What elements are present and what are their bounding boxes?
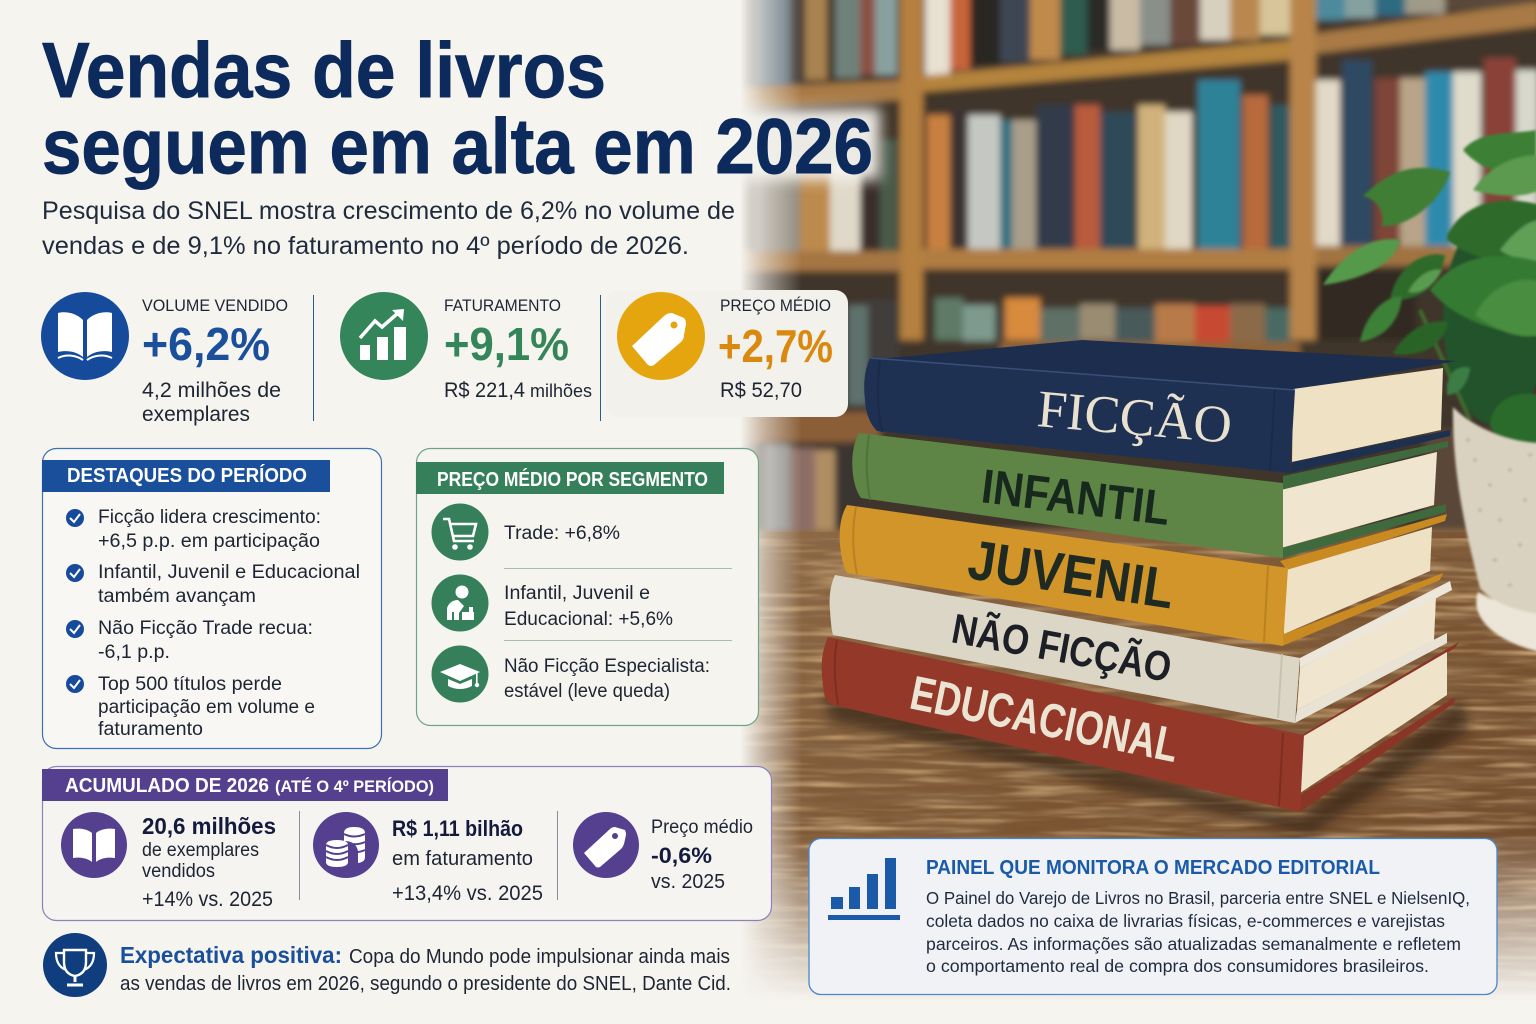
stat: faturamento [340,292,592,402]
item: exemplares [61,812,276,911]
icon: book [61,812,127,878]
segment text: trade: Trade: +6,8% [504,523,620,544]
segment text: infantil: Educacional: +5,6% [504,609,673,630]
stat card: preço médio: R$ 52,70 [720,379,802,402]
segment text: infantil [504,583,673,630]
stat: faturamento: milhões [530,381,592,401]
left fill [0,0,741,1024]
book: Não Ficção: NÃO FICÇÃO [948,605,1175,691]
item: preço médio: Preço médio [651,817,753,838]
bullet text [98,507,360,740]
photo: bottom fade to cream [740,832,1536,1024]
shelf row 3 [765,445,790,530]
book: Não Ficção [830,575,1452,723]
shelf row 2 [848,305,868,405]
stat: faturamento: R$ 221,4 [444,379,525,402]
icon: open book [41,292,129,380]
book stack [822,340,1470,835]
callout: expectativa positiva: Copa do Mundo pode impulsionar ainda mais [349,946,730,968]
bullet text: +6,5 p.p. em participação [98,531,320,552]
title: Vendas de livros [42,26,606,114]
book: Educacional [822,637,1459,812]
subtitle: vendas e de 9,1% no faturamento no 4º período de 2026. [42,232,689,260]
stat card: preço médio: PREÇO MÉDIO [720,296,831,315]
item: preço médio: -0,6% [651,843,712,868]
book: Infantil: INFANTIL [979,460,1173,536]
heading: destaques [42,460,330,492]
book: Juvenil: JUVENIL [964,528,1178,620]
shelf row 0 [755,0,790,85]
photo: wooden table [690,532,1536,1024]
book: Ficção [864,340,1456,473]
stat: volume vendido: +6,2% [142,318,270,370]
title: seguem em alta em 2026 [42,102,873,190]
stat: volume vendido: 4,2 milhões de [142,379,281,402]
icon: price tag [617,292,705,380]
stat card: preço médio: +2,7% [718,320,833,372]
book: Juvenil [840,505,1447,646]
icon: growth chart [340,292,428,380]
panel: preço médio por segmento [416,448,758,726]
subtitle [42,197,735,260]
photo: plant and pot [1323,130,1536,652]
icon: tag [573,812,639,878]
item: exemplares: de exemplares [142,840,259,861]
heading: segmento [416,462,724,494]
icon: coins [313,812,379,878]
item: faturamento: +13,4% vs. 2025 [392,882,543,905]
panel: painel que monitora o mercado editorial: PAINEL QUE MONITORA O MERCADO EDITORIAL [926,857,1380,879]
bullet text: Ficção lidera crescimento: [98,507,321,528]
panel body text: O Painel do Varejo de Livros no Brasil, parceria entre SNEL e NielsenIQ, [926,888,1470,908]
stat card: preço médio [606,290,848,417]
icon: trophy [43,933,107,997]
photo: blurred bookshelf [690,0,1536,590]
heading: acumulado [42,769,448,801]
item: preço médio [573,812,753,893]
icon: graduation cap [432,646,488,702]
bullet text: -6,1 p.p. [98,642,170,663]
book: Educacional: EDUCACIONAL [906,667,1183,773]
stat: volume vendido: exemplares [142,403,250,426]
segment text: especialista [504,656,710,702]
item: exemplares: +14% vs. 2025 [142,888,273,911]
item: preço médio: vs. 2025 [651,871,725,893]
bullet text: Infantil, Juvenil e Educacional [98,562,360,583]
panel body text: o comportamento real de compra dos consumidores brasileiros. [926,956,1429,976]
subtitle: Pesquisa do SNEL mostra crescimento de 6,2% no volume de [42,197,735,225]
bullet icons [66,509,84,693]
panel body text [926,888,1470,976]
panel: acumulado de 2026 [42,766,772,920]
heading: acumulado: ACUMULADO DE 2026 [65,775,269,797]
callout: expectativa positiva [43,933,731,997]
panel body text: parceiros. As informações são atualizadas semanalmente e refletem [926,934,1461,954]
stat: volume vendido [41,292,288,426]
title [42,26,873,190]
shelf row 1 right [1305,80,1340,255]
callout: expectativa positiva: Expectativa positiva: [120,942,342,968]
stat: faturamento: +9,1% [444,318,569,370]
heading: destaques: DESTAQUES DO PERÍODO [67,464,307,487]
panel: painel que monitora o mercado editorial [809,838,1497,994]
segment text: infantil: Infantil, Juvenil e [504,583,650,604]
icon: reader [432,574,488,632]
book: Ficção: FICÇÃO [1035,380,1234,455]
heading: segmento: PREÇO MÉDIO POR SEGMENTO [437,468,708,491]
icon: bar chart [828,858,900,920]
bullet text: faturamento [98,719,203,740]
book: Infantil [852,433,1448,558]
shelf row 1 left [755,165,800,257]
bullet text: Não Ficção Trade recua: [98,618,313,639]
item: faturamento: R$ 1,11 bilhão [392,816,523,841]
item: faturamento [313,812,543,905]
bullet text: também avançam [98,586,256,607]
item: exemplares: 20,6 milhões [142,813,276,839]
panel: destaques do período [42,448,382,748]
item: faturamento: em faturamento [392,848,533,870]
bullet text: Top 500 títulos perde [98,674,282,695]
heading: acumulado: (ATÉ O 4º PERÍODO) [275,777,434,796]
segment text: especialista: Não Ficção Especialista: [504,656,710,677]
shelf row 1 middle [927,115,950,250]
item: exemplares: vendidos [142,861,215,882]
photo: left fade to cream [740,0,802,1024]
bullet text: participação em volume e [98,697,315,718]
stat: faturamento: FATURAMENTO [444,296,561,315]
stat: volume vendido: VOLUME VENDIDO [142,296,288,315]
panel body text: coleta dados no caixa de livrarias físicas, e-commerces e varejistas [926,911,1445,931]
callout: expectativa positiva: as vendas de livros em 2026, segundo o presidente do SNEL, Dante Cid. [120,973,731,995]
icon: cart [432,504,488,560]
title backing haze [690,108,880,180]
shelf boards [700,80,900,110]
segment text: especialista: estável (leve queda) [504,681,670,702]
